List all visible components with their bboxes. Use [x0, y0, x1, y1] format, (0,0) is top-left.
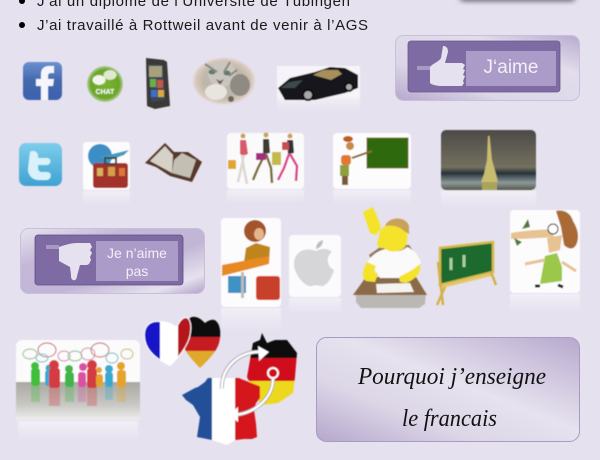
head	[377, 224, 407, 251]
bullet list	[19, 0, 368, 34]
exchange arrows	[216, 346, 278, 422]
button label panel	[96, 241, 178, 281]
label: J‘aime	[484, 57, 538, 78]
shadow of cropped panel top right	[460, 0, 575, 1]
panel title line 1: Pourquoi j’enseigne	[357, 364, 546, 390]
image: open book	[145, 143, 202, 182]
panel title line 2: le francais	[402, 406, 497, 432]
bullet line 2: J’ai travaillé à Rottweil avant de venir à l’AGS	[37, 17, 368, 34]
image: green chalkboard on easel	[437, 242, 496, 305]
icon: twitter	[19, 143, 62, 186]
left arm	[363, 262, 378, 282]
panel background	[316, 338, 580, 442]
German heart	[184, 316, 222, 368]
French heart	[144, 317, 192, 360]
icon: chat	[87, 66, 123, 102]
image: people with speech bubbles	[16, 340, 140, 441]
label second line: pas	[126, 263, 148, 279]
thumb sleeve	[417, 66, 430, 70]
image: cat	[192, 57, 256, 105]
button inner	[408, 41, 560, 92]
Bart	[363, 207, 381, 235]
image: cartoon yellow teacher at desk	[353, 207, 427, 308]
icon: facebook	[23, 62, 62, 100]
paper	[376, 283, 414, 293]
image: silver apple logo	[289, 235, 341, 314]
France map	[180, 378, 260, 448]
woman 3	[278, 134, 297, 181]
reflections	[31, 386, 126, 406]
hair	[385, 218, 409, 234]
speech bubbles	[23, 343, 133, 363]
image: fashion women	[227, 132, 304, 203]
Germany map	[245, 331, 299, 407]
gray desk front	[356, 292, 426, 308]
image: cartoon teacher at board	[333, 133, 411, 204]
icon: smartphone	[146, 58, 170, 109]
image: eiffel tower at night	[441, 130, 536, 207]
label: Je n’aime	[107, 245, 167, 261]
right arm	[399, 264, 420, 283]
icon: thumb up	[430, 46, 465, 86]
image: black car	[277, 66, 360, 112]
figures	[31, 360, 126, 388]
icon: French and German hearts	[143, 315, 222, 369]
icon: thumb down	[59, 243, 92, 280]
image: Pinocchio woman with long nose	[510, 210, 580, 312]
white shirt	[367, 247, 421, 278]
button: Je n'aime pas	[20, 228, 204, 294]
icon: chat: CHAT	[96, 89, 115, 96]
map: France and Germany exchange	[180, 331, 299, 448]
desk top	[353, 277, 427, 295]
button frame	[396, 36, 580, 100]
button: J'aime	[396, 36, 580, 100]
button label panel	[466, 51, 556, 86]
button frame	[20, 228, 204, 294]
panel: Pourquoi j'enseigne le français	[316, 338, 580, 442]
French heart outline	[145, 318, 190, 365]
brown shoulders	[369, 245, 419, 267]
woman 2	[253, 132, 281, 183]
button inner	[35, 235, 183, 285]
thumb sleeve	[46, 245, 59, 249]
image: woman at desk	[221, 218, 281, 332]
image: globe and suitcase	[83, 142, 130, 205]
woman 1	[228, 134, 248, 184]
